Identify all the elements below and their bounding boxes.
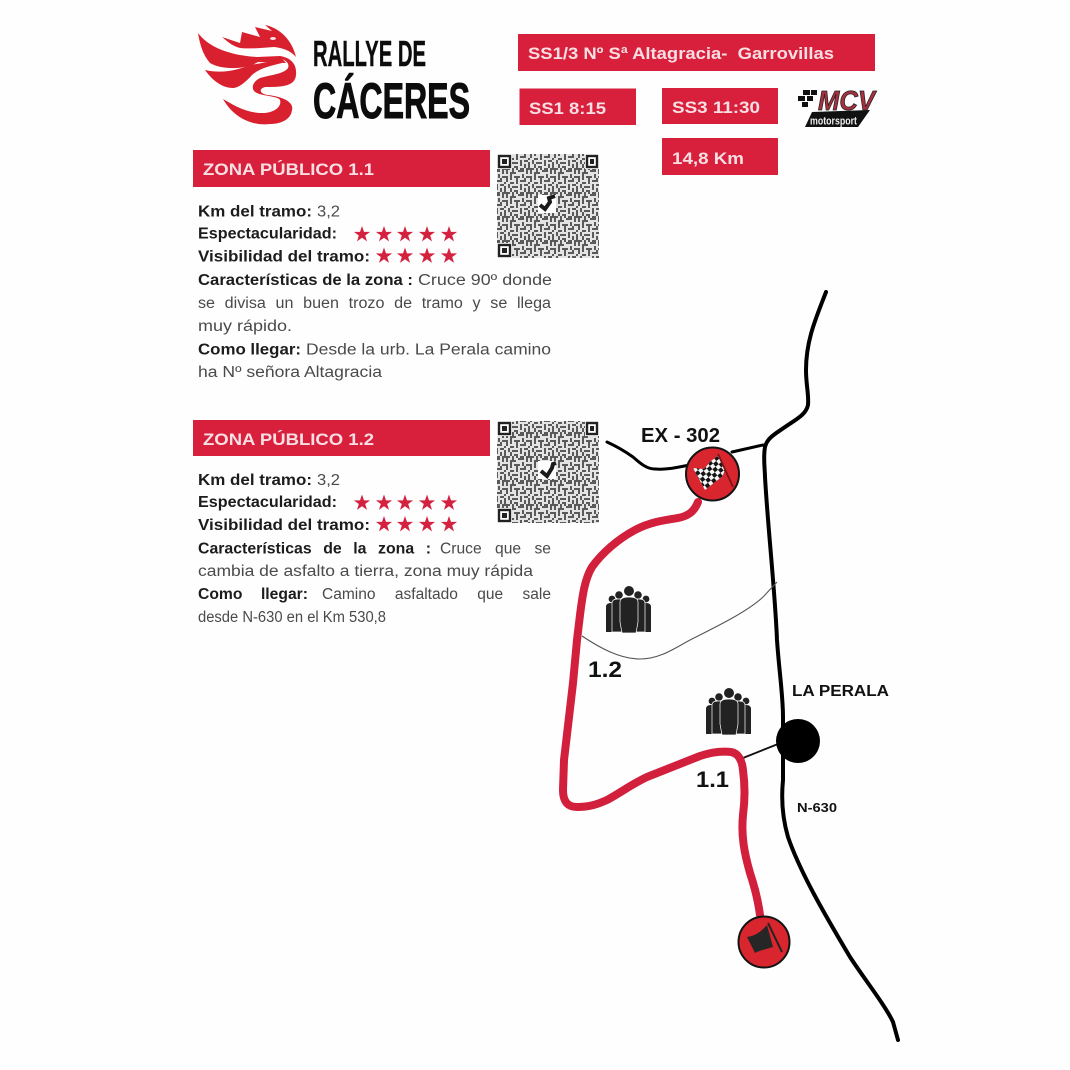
rating: espectacularidad: Espectacularidad: xyxy=(198,494,337,511)
header: stage name banner: SS1/3 Nº Sª Altagracia- Garrovillas xyxy=(528,44,834,63)
text: km del tramo: 3,2 xyxy=(317,472,340,489)
rating: espectacularidad xyxy=(198,494,457,511)
rating: visibilidad xyxy=(198,516,457,534)
badge: distance: 14,8 Km xyxy=(672,149,744,168)
road: EX-302 xyxy=(607,442,763,469)
badge: distance xyxy=(662,138,778,175)
QR code 1.1 xyxy=(497,154,599,258)
QR code 1.2 xyxy=(497,421,599,523)
text: como llegar: desde N-630 en el Km 530,8 xyxy=(198,609,386,626)
panel: zona público 1.2 xyxy=(193,420,551,626)
text: características xyxy=(198,540,551,580)
icon: finish black flag xyxy=(738,916,790,968)
text: km del tramo: Km del tramo: xyxy=(198,472,312,489)
heading: zona 1.2: ZONA PÚBLICO 1.2 xyxy=(203,430,374,449)
rating: espectacularidad xyxy=(198,226,457,242)
icon: crowd at zone 1.1 xyxy=(706,688,751,735)
heading: zona 1.1 xyxy=(193,150,490,187)
road: link to La Perala xyxy=(743,744,778,758)
icon: red phoenix xyxy=(198,25,296,124)
rating: visibilidad xyxy=(198,248,457,266)
logo: Rallye de Cáceres xyxy=(198,25,470,129)
panel: zona público 1.1 xyxy=(193,150,552,381)
text: como llegar: Como llegar: xyxy=(198,586,308,603)
label: zone 1.2: 1.2 xyxy=(588,657,622,682)
label: zone 1.1: 1.1 xyxy=(696,767,729,792)
badge: SS3 time: SS3 11:30 xyxy=(672,98,760,117)
icon: crowd at zone 1.2 xyxy=(606,586,651,633)
badge: SS3 time xyxy=(662,88,778,124)
label: EX-302: EX - 302 xyxy=(641,425,720,447)
logo: MCV motorsport: motorsport xyxy=(810,116,857,128)
text: km del tramo: Km del tramo: xyxy=(198,204,312,220)
logo: MCV motorsport xyxy=(798,85,877,128)
rating: visibilidad: Visibilidad del tramo: xyxy=(198,517,370,534)
logo wordmark line 1: RALLYE DE xyxy=(313,33,426,74)
text: como llegar xyxy=(198,586,551,626)
logo: MCV motorsport: MCV xyxy=(818,85,877,116)
text: como llegar: ha Nº señora Altagracia xyxy=(198,364,382,381)
text: como llegar: Desde la urb. La Perala camino xyxy=(306,342,551,358)
map xyxy=(563,292,898,1040)
logo wordmark line 2: CÁCERES xyxy=(313,73,470,129)
text: características: Características de la zona : xyxy=(198,540,431,558)
text: como llegar xyxy=(198,342,551,381)
text: km del tramo: 3,2 xyxy=(317,204,340,220)
text: como llegar: Como llegar: xyxy=(198,342,301,358)
icon: start checkered flag xyxy=(686,448,739,500)
badge: SS1 time xyxy=(520,88,636,125)
text: características: Cruce 90º donde xyxy=(418,272,552,289)
heading: zona 1.1: ZONA PÚBLICO 1.1 xyxy=(203,160,374,179)
text: características xyxy=(198,272,552,335)
badge: SS1 time: SS1 8:15 xyxy=(529,99,606,118)
marker: La Perala roundabout xyxy=(776,719,820,763)
text: características: cambia de asfalto a tierra, zona muy rápida xyxy=(198,563,533,580)
text: características: Cruce que se xyxy=(440,540,551,558)
header: stage name banner xyxy=(518,34,875,71)
text: características: Características de la zona : xyxy=(198,272,413,289)
text: como llegar: Camino asfaltado que sale xyxy=(322,586,551,603)
heading: zona 1.2 xyxy=(193,420,490,456)
rating: visibilidad: Visibilidad del tramo: xyxy=(198,248,370,266)
road: thin side road xyxy=(582,582,777,659)
label: La Perala: LA PERALA xyxy=(792,683,889,700)
text: características: muy rápido. xyxy=(198,318,292,335)
text: características: se divisa un buen trozo de tramo y se llega xyxy=(198,295,551,312)
label: N-630: N-630 xyxy=(797,800,837,815)
road: N-630 and north branch xyxy=(764,292,898,1040)
rating: espectacularidad: Espectacularidad: xyxy=(198,226,337,242)
route: red stage line xyxy=(563,502,760,915)
